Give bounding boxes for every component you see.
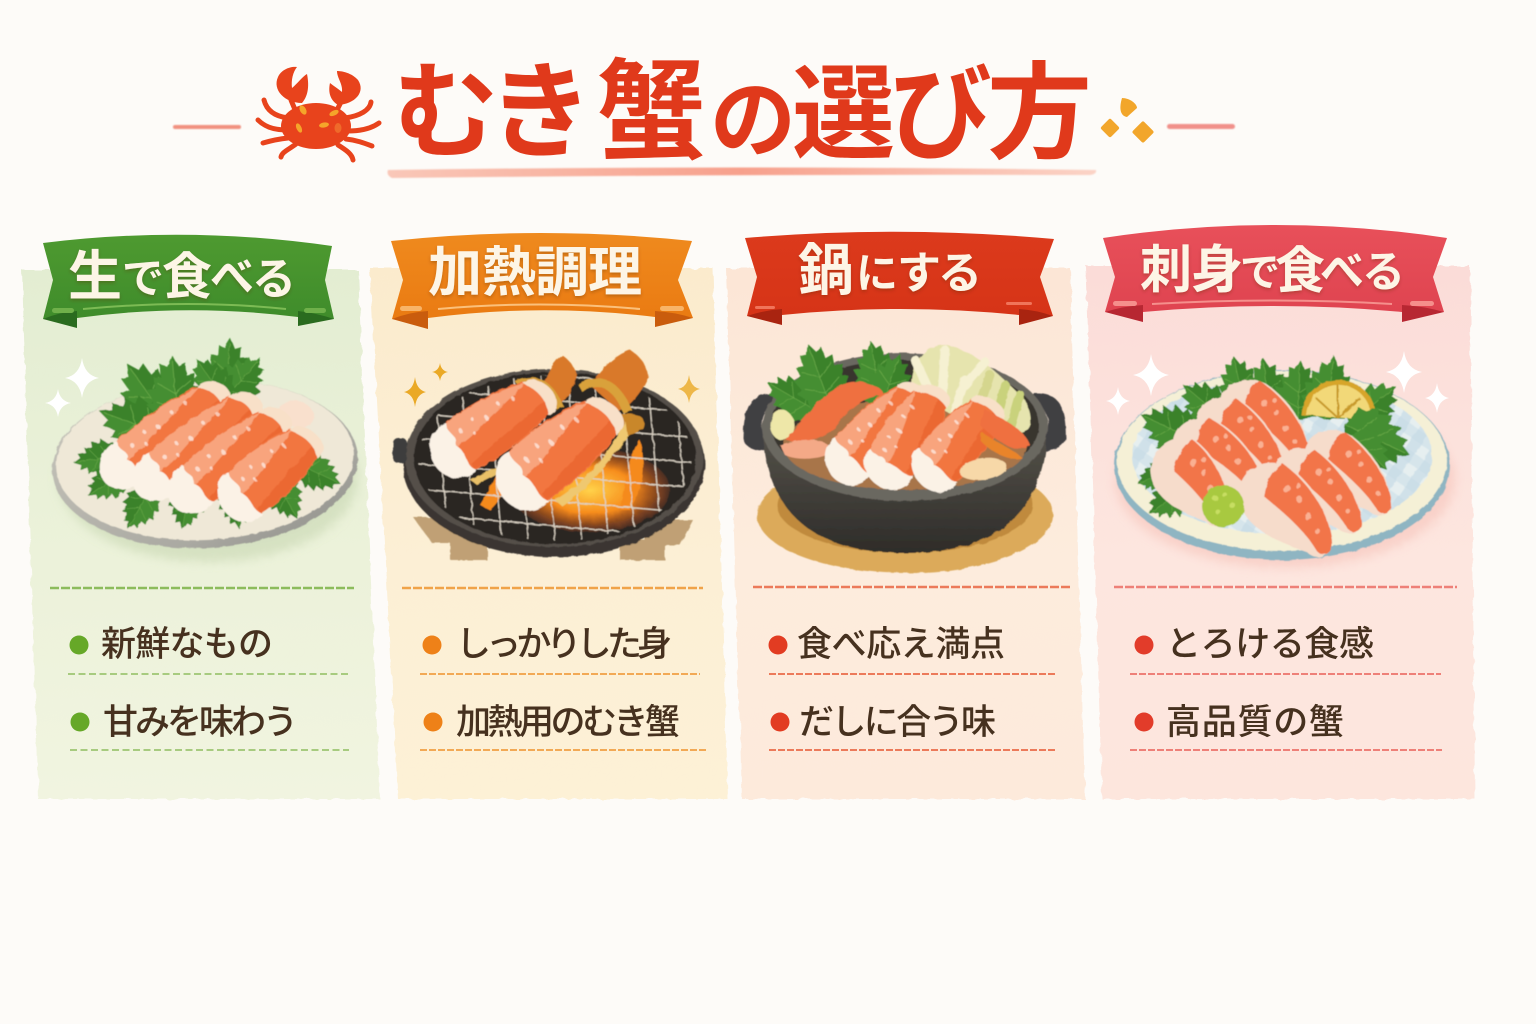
bullet item: 甘みを味わう: 甘みを味わう bbox=[103, 703, 298, 742]
bullet item: とろける食感: とろける食感 bbox=[1166, 625, 1374, 664]
title underline bbox=[388, 168, 1096, 178]
bullet item: しっかりした身: しっかりした身 bbox=[456, 625, 672, 664]
ribbon: 加熱調理: 加 bbox=[428, 243, 482, 303]
bullet item: 加熱用のむき蟹: 加熱用のむき蟹 bbox=[456, 703, 680, 742]
ribbon: 刺身で食べる bbox=[1103, 225, 1447, 322]
ribbon: 刺身で食べる: 刺 bbox=[1140, 242, 1192, 300]
title text: 選 bbox=[792, 57, 895, 172]
panel background bbox=[370, 268, 728, 799]
ribbon: 鍋にする: る bbox=[938, 249, 982, 298]
title line right bbox=[1167, 124, 1235, 129]
divider bbox=[1114, 586, 1457, 588]
sparkles bbox=[404, 363, 700, 407]
illustration: crab hot pot bbox=[743, 335, 1066, 573]
panel background bbox=[22, 270, 380, 799]
illustration: crab sashimi on plate bbox=[1114, 351, 1455, 568]
ribbon: 加熱調理 bbox=[391, 233, 693, 329]
title group bbox=[173, 52, 1235, 178]
ribbon: 鍋にする: す bbox=[897, 249, 941, 298]
panel background bbox=[726, 268, 1085, 799]
ribbon: 加熱調理: 調 bbox=[535, 243, 589, 303]
ribbon: 生で食べる: 生 bbox=[68, 247, 122, 307]
bullet item: 食べ応え満点: 食べ応え満点 bbox=[797, 625, 1005, 664]
title text: 蟹 bbox=[597, 52, 706, 174]
icon: crab bbox=[258, 67, 379, 160]
ribbon: 生で食べる: べ bbox=[210, 253, 254, 302]
ribbon: 刺身で食べる: 食 bbox=[1275, 243, 1325, 299]
ribbon: 鍋にする: に bbox=[856, 250, 898, 297]
sparkles bbox=[1106, 351, 1449, 415]
title line left bbox=[173, 125, 241, 129]
title text: 方 bbox=[987, 56, 1092, 173]
ribbon: 加熱調理: 熱 bbox=[482, 243, 536, 303]
ribbon: 加熱調理: 理 bbox=[588, 243, 642, 303]
ribbon: 生で食べる: る bbox=[252, 255, 296, 304]
list bbox=[768, 625, 1057, 750]
sparkles bbox=[45, 358, 99, 417]
ribbon: 生で食べる bbox=[43, 235, 334, 328]
illustration: grilled crab on net bbox=[393, 350, 720, 560]
title text: の bbox=[710, 73, 796, 169]
panel: 鍋にする bbox=[726, 232, 1085, 799]
ribbon: 生で食べる: で bbox=[122, 255, 164, 302]
ribbon: 刺身で食べる: で bbox=[1240, 251, 1280, 295]
divider bbox=[753, 586, 1070, 588]
ribbon: 刺身で食べる: 身 bbox=[1191, 242, 1243, 300]
divider bbox=[402, 587, 703, 589]
bullet item: 新鮮なもの: 新鮮なもの bbox=[101, 625, 273, 664]
list bbox=[1130, 625, 1442, 750]
divider bbox=[50, 587, 354, 589]
illustration: crab on plate with shiso bbox=[48, 336, 362, 562]
bullet item: 高品質の蟹: 高品質の蟹 bbox=[1166, 703, 1344, 742]
ribbon: 生で食べる: 食 bbox=[162, 249, 212, 305]
title text: き bbox=[488, 55, 593, 172]
panel background bbox=[1086, 266, 1475, 799]
panel: 刺身で食べる bbox=[1086, 225, 1475, 799]
ribbon: 鍋にする bbox=[745, 232, 1054, 325]
ribbon: 刺身で食べる: べ bbox=[1320, 247, 1364, 296]
panel: 加熱調理 bbox=[370, 233, 728, 799]
ribbon: 刺身で食べる: る bbox=[1362, 249, 1405, 297]
list bbox=[68, 625, 349, 750]
panel: 生で食べる bbox=[22, 235, 380, 799]
ribbon: 鍋にする: 鍋 bbox=[798, 239, 854, 302]
list bbox=[420, 625, 706, 750]
bullet item: だしに合う味: だしに合う味 bbox=[799, 703, 996, 742]
title text: む bbox=[393, 55, 498, 172]
icon: gold diamonds bbox=[1100, 98, 1154, 143]
title text: び bbox=[889, 57, 992, 172]
